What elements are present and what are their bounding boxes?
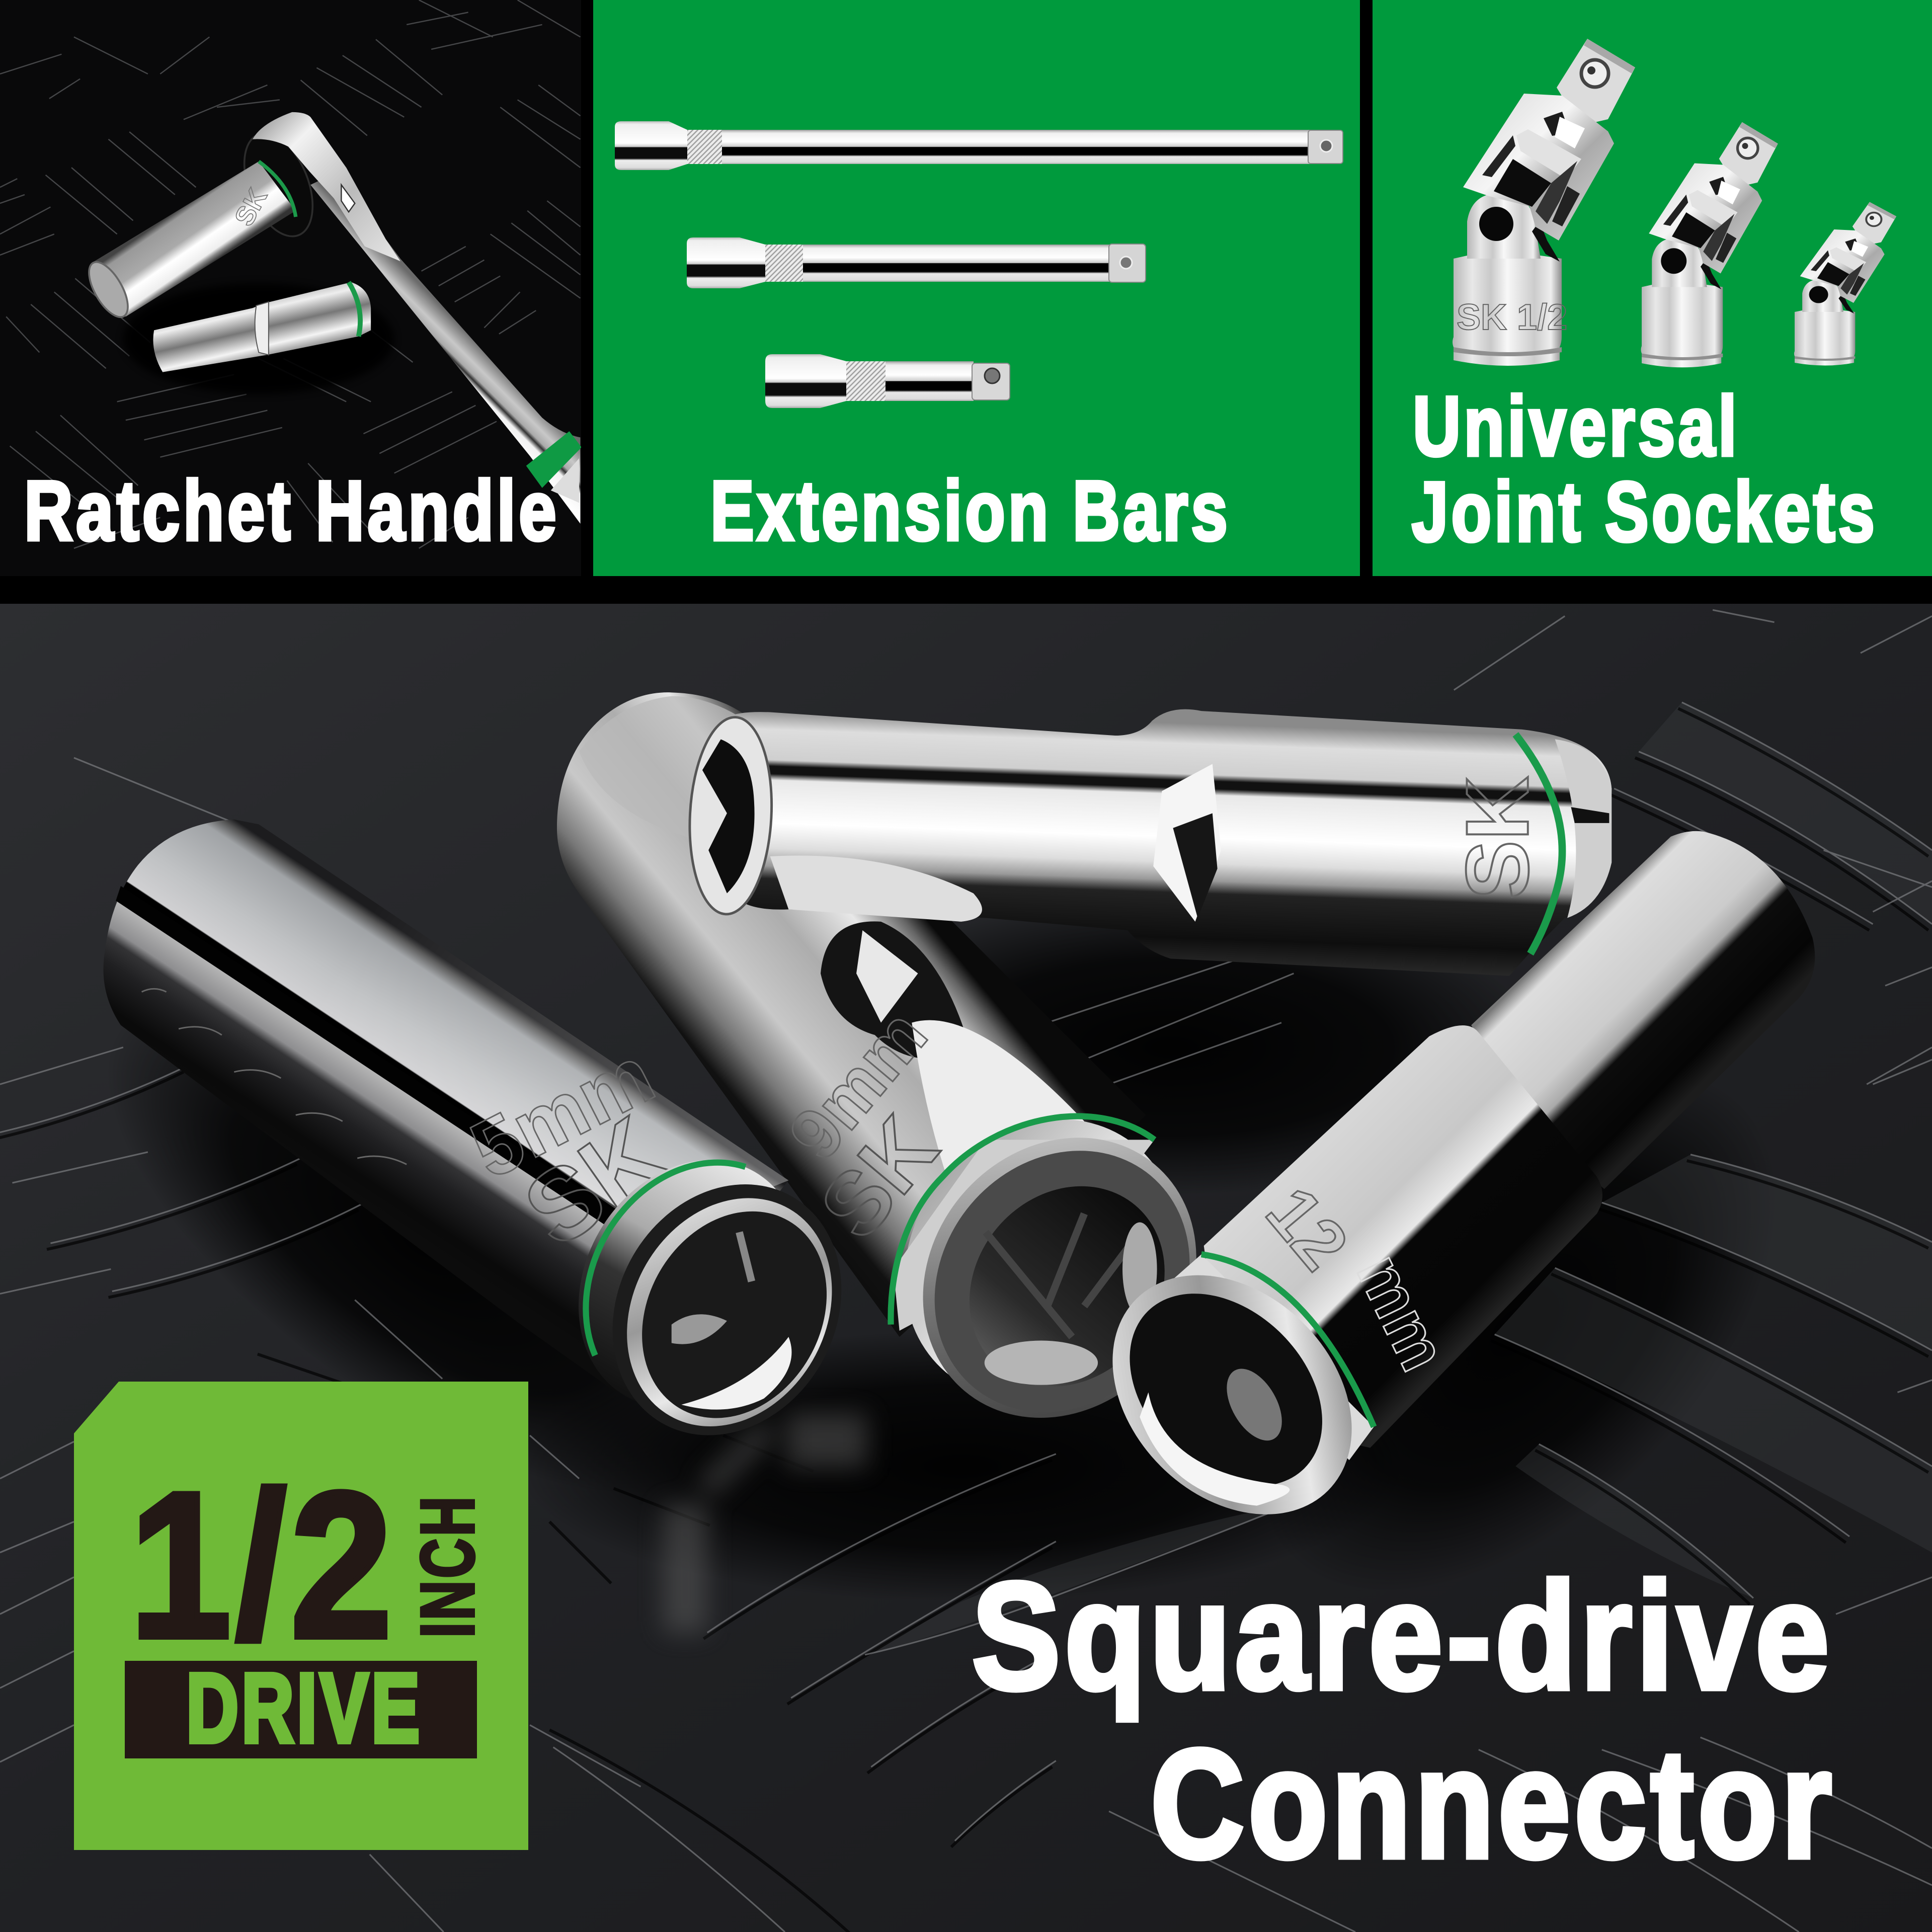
socket: top (685, 709, 1612, 976)
handle end grip (551, 458, 579, 503)
collar (848, 1064, 1234, 1455)
tread plate streaks (0, 0, 580, 548)
opening reflection (681, 1337, 791, 1410)
lower reflection (770, 856, 982, 922)
opening interior (1092, 1256, 1360, 1524)
panel: main photo of sockets (0, 604, 1932, 1932)
black stripe over front (116, 886, 654, 1254)
opening reflection (1140, 1392, 1290, 1506)
drive bar (125, 1661, 477, 1758)
panel: universal joint sockets (1373, 0, 1932, 576)
deep socket: SK (229, 183, 273, 231)
floor streak highlights (0, 610, 1932, 1932)
badge background (74, 1382, 528, 1850)
heading: extension bars: Extension Bars (710, 463, 1231, 558)
medium extension bar (687, 237, 1146, 288)
short socket (153, 282, 371, 372)
long extension bar (615, 121, 1343, 170)
floor reflections (663, 1413, 867, 1633)
opening rim (866, 1082, 1253, 1473)
heading: universal joint sockets (1412, 379, 1878, 559)
bottom dimples (142, 989, 407, 1164)
title: square-drive connector (972, 1551, 1836, 1890)
heading: ratchet handle: Ratchet Handle (24, 463, 559, 558)
floor plate lens bands (865, 702, 1932, 1655)
engraved size and logo: 9mm (774, 995, 942, 1174)
fraction: 1/2 (130, 1450, 396, 1681)
green ring (586, 1163, 746, 1355)
drive label: DRIVE (186, 1653, 423, 1763)
ground shadows (29, 900, 1873, 1688)
floor streak shadows (0, 708, 1928, 1932)
collar (1171, 1254, 1374, 1460)
green ring (1201, 1254, 1374, 1427)
collar (535, 1119, 845, 1448)
socket: left (104, 820, 886, 1477)
socket: middle: SK (801, 1099, 956, 1257)
engraved logo: SK (1448, 776, 1547, 900)
green background (1373, 0, 1932, 576)
ratchet head (253, 112, 400, 261)
inch label: INCH (405, 1494, 490, 1638)
green ring (1515, 735, 1562, 954)
socket: left: SK (505, 1095, 684, 1268)
ratchet handle shaft (310, 168, 580, 524)
engraved size: 12 (1251, 1172, 1363, 1284)
opening interior (929, 1147, 1205, 1426)
green ring (891, 1116, 1155, 1325)
green background (593, 0, 1360, 576)
heading: universal joint sockets: Universal (1413, 379, 1740, 473)
handle green band (526, 431, 582, 488)
title: square-drive connector: Square-drive (972, 1551, 1833, 1722)
panel: ratchet handle (0, 0, 582, 576)
short extension bar (765, 354, 1010, 408)
end cap highlight (1555, 739, 1612, 918)
chrome reflection (821, 921, 971, 1059)
opening (685, 715, 776, 916)
shadow under tools (123, 283, 394, 394)
engraved size and logo: 5mm (457, 1029, 668, 1196)
medium universal joint (1641, 122, 1778, 367)
ratchet head back plate (231, 123, 326, 246)
socket group (0, 610, 1932, 1932)
panel: extension bars (593, 0, 1360, 576)
large universal joint (1453, 39, 1635, 366)
badge: 1/2 inch drive (74, 1382, 528, 1850)
small universal joint (1794, 202, 1896, 365)
large universal joint: SK 1/2 (1457, 297, 1567, 338)
neck facet (1153, 764, 1221, 922)
floor background (0, 604, 1932, 1932)
opening rim (568, 1143, 886, 1477)
wide section (1204, 1025, 1602, 1448)
socket: middle (557, 692, 1253, 1473)
socket: right: mm (1342, 1243, 1461, 1382)
socket: right (1065, 831, 1815, 1562)
deep socket (82, 162, 296, 323)
ratchet and sockets illustration (0, 0, 582, 548)
dark background (0, 0, 581, 576)
opening rim (1065, 1228, 1399, 1562)
ratchet head diamond detail (341, 185, 355, 212)
opening interior (605, 1178, 863, 1452)
narrow section (1471, 831, 1815, 1189)
